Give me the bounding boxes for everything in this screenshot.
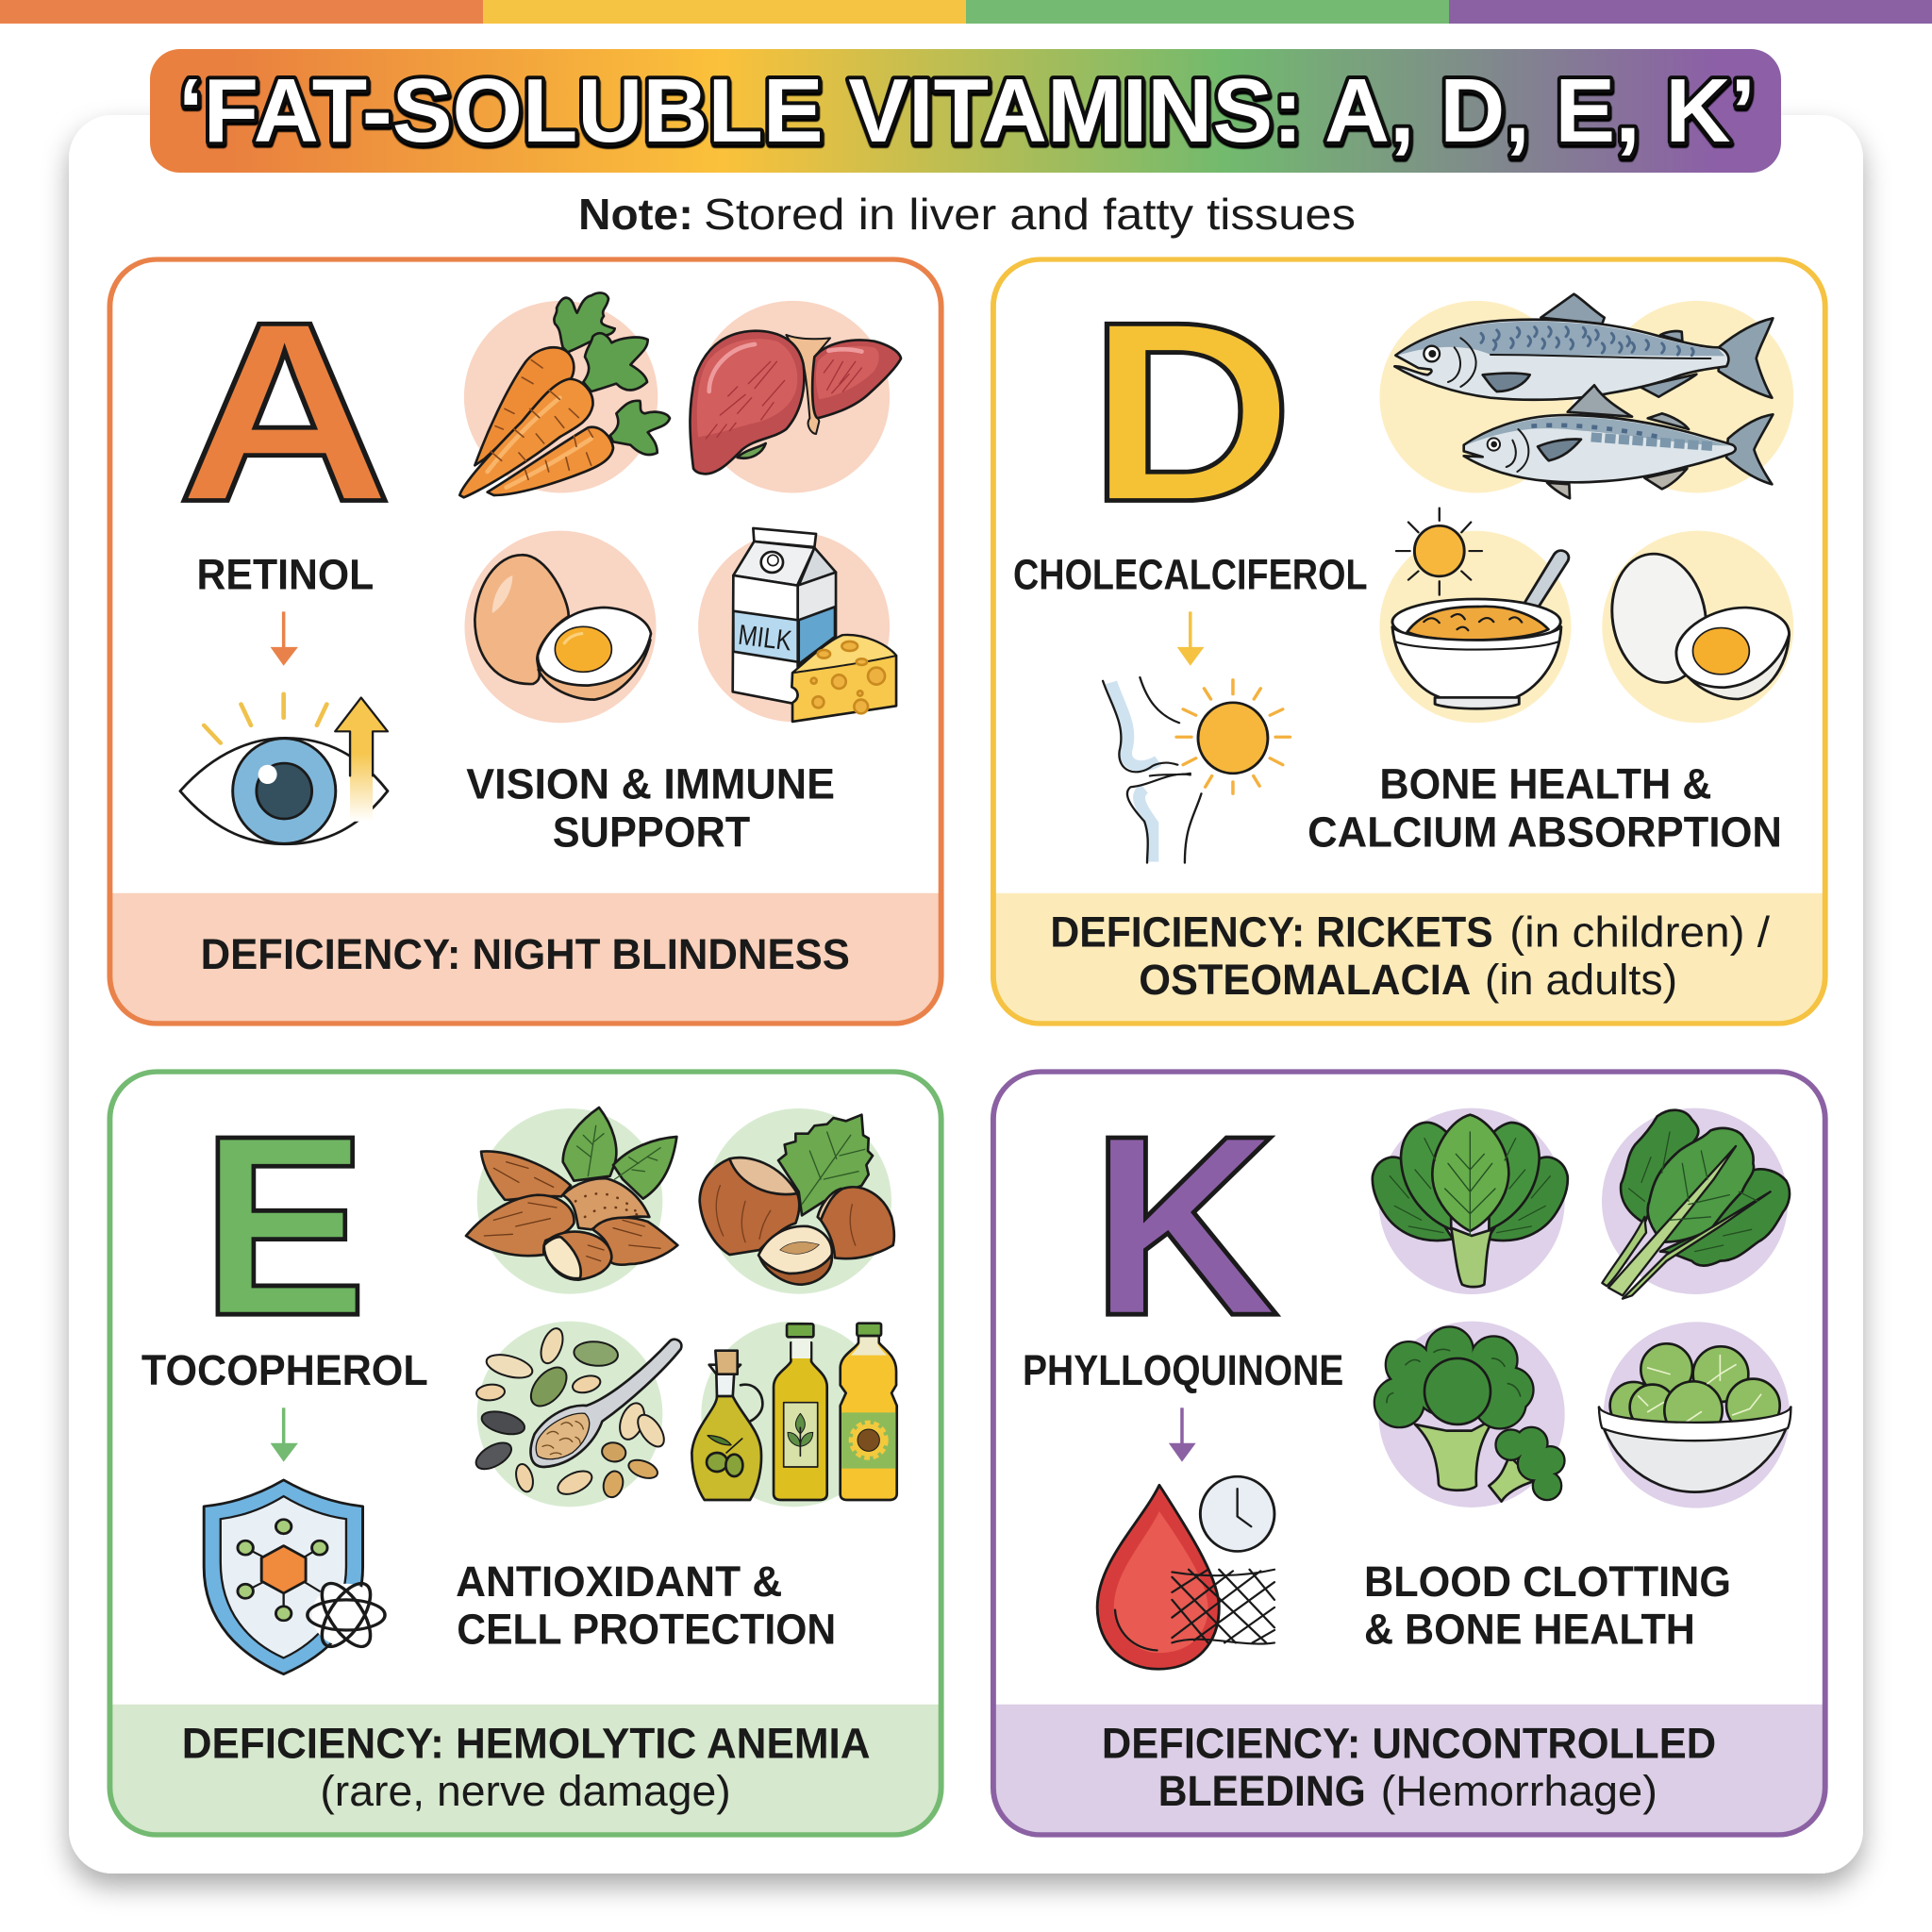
deficiency text K: DEFICIENCY: UNCONTROLLED xyxy=(1102,1720,1716,1767)
icon: oil bottles xyxy=(691,1324,897,1500)
deficiency text K: (Hemorrhage) xyxy=(1381,1767,1657,1814)
icon: carrots xyxy=(459,292,670,497)
heading: retinol: RETINOL xyxy=(197,550,374,598)
food backdrop circles K xyxy=(1378,1108,1790,1508)
arrow A xyxy=(271,611,298,666)
deficiency text K xyxy=(1102,1720,1716,1814)
benefit text A: SUPPORT xyxy=(553,808,750,856)
icon: fish small xyxy=(1464,385,1773,498)
panel: vitamin E xyxy=(109,1072,941,1835)
deficiency text D: OSTEOMALACIA xyxy=(1139,956,1471,1003)
heading: phylloquinone: PHYLLOQUINONE xyxy=(1023,1346,1343,1394)
note line: Note: xyxy=(578,190,693,239)
deficiency band E xyxy=(109,1705,941,1835)
food backdrop circles A xyxy=(464,301,890,723)
icon: shield with molecule and atom xyxy=(204,1480,385,1674)
deficiency band D xyxy=(993,893,1825,1024)
benefit text A: VISION & IMMUNE xyxy=(466,760,835,808)
benefit text K: & BONE HEALTH xyxy=(1364,1605,1695,1653)
deficiency text D xyxy=(1050,908,1771,1003)
arrow D xyxy=(1177,611,1204,666)
heading: cholecalciferol: CHOLECALCIFEROL xyxy=(1013,550,1368,598)
letter E: E xyxy=(201,1083,367,1369)
benefit text E xyxy=(456,1557,836,1653)
arrow K xyxy=(1169,1407,1196,1462)
letter K: K xyxy=(1091,1083,1279,1369)
deficiency text D: DEFICIENCY: RICKETS xyxy=(1050,908,1493,956)
icon: seeds and spoon xyxy=(472,1325,681,1499)
deficiency text E xyxy=(182,1720,871,1814)
benefit text E: ANTIOXIDANT & xyxy=(456,1557,782,1606)
benefit text D xyxy=(1307,760,1782,856)
deficiency text A: DEFICIENCY: NIGHT BLINDNESS xyxy=(201,930,850,978)
benefit text E: CELL PROTECTION xyxy=(457,1605,836,1653)
food backdrop circles E xyxy=(477,1108,891,1507)
panel: vitamin K xyxy=(993,1072,1825,1835)
arrow E xyxy=(271,1407,298,1462)
deficiency text K: BLEEDING xyxy=(1158,1767,1366,1814)
deficiency text E: DEFICIENCY: HEMOLYTIC ANEMIA xyxy=(182,1720,871,1767)
title text: ‘FAT-SOLUBLE VITAMINS: A, D, E, K’ xyxy=(178,60,1756,161)
icon: bone joint with sun xyxy=(1103,677,1290,863)
benefit text K: BLOOD CLOTTING xyxy=(1364,1557,1731,1606)
top colour stripe xyxy=(0,0,1932,24)
deficiency band K xyxy=(993,1705,1825,1835)
icon: egg A xyxy=(475,555,651,700)
deficiency text D: (in adults) xyxy=(1485,956,1677,1003)
benefit text K xyxy=(1364,1557,1731,1653)
icon: egg D xyxy=(1603,548,1790,699)
panel: vitamin A xyxy=(109,259,941,1024)
icon: brussels sprouts xyxy=(1599,1343,1790,1492)
letter A: A xyxy=(176,269,392,556)
benefit text D: CALCIUM ABSORPTION xyxy=(1307,808,1782,856)
icon: hazelnuts xyxy=(700,1115,894,1285)
panel: vitamin D xyxy=(993,259,1825,1024)
food backdrop circles D xyxy=(1379,301,1793,723)
note line: Stored in liver and fatty tissues xyxy=(704,190,1356,239)
heading: tocopherol: TOCOPHEROL xyxy=(142,1346,428,1394)
deficiency text D: (in children) / xyxy=(1509,908,1771,956)
deficiency band A xyxy=(109,893,941,1024)
icon: liver xyxy=(690,331,901,474)
icon: blood drop with clock and net xyxy=(1097,1476,1274,1669)
benefit text A xyxy=(466,760,835,856)
icon: milk and cheese xyxy=(733,528,896,722)
icon: fish large xyxy=(1394,294,1773,400)
icon: almonds xyxy=(466,1108,677,1280)
benefit text D: BONE HEALTH & xyxy=(1379,760,1711,808)
icon: eye with arrow xyxy=(180,694,388,844)
icon: kale xyxy=(1602,1110,1790,1299)
letter D: D xyxy=(1088,269,1293,556)
icon: spinach xyxy=(1373,1115,1568,1287)
milk label: MILK xyxy=(737,620,793,657)
icon: broccoli xyxy=(1375,1328,1563,1502)
title banner xyxy=(150,49,1781,173)
deficiency text E: (rare, nerve damage) xyxy=(320,1767,731,1814)
icon: cereal bowl with sun xyxy=(1392,508,1569,708)
